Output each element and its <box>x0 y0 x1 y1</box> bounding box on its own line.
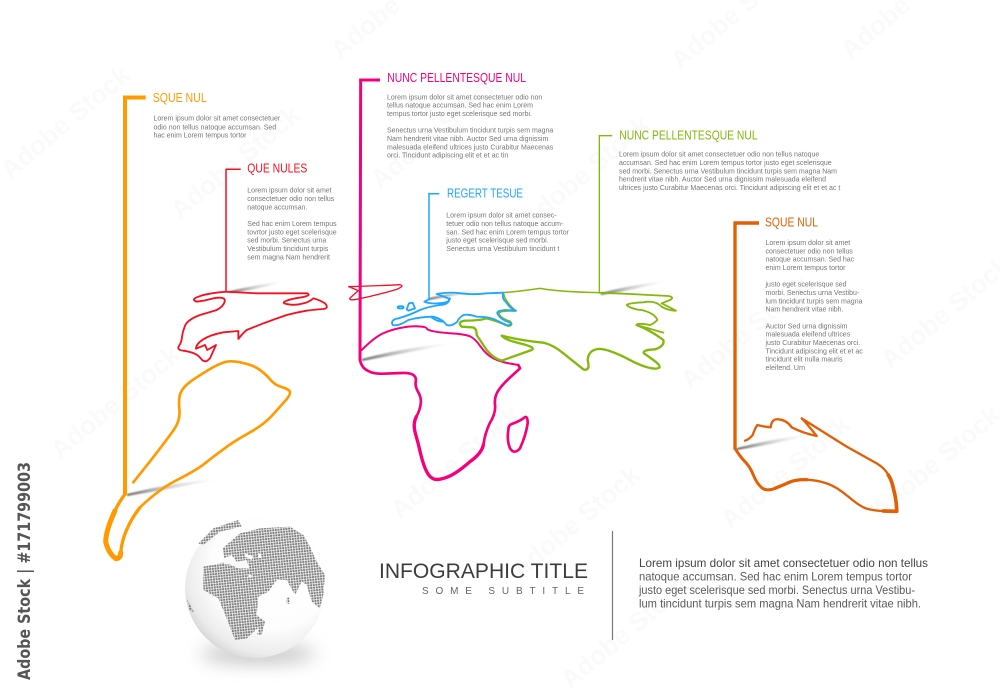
text: orange block: odio non tellus natoque accumsan. Sed <box>154 122 276 131</box>
label: NUNC PELLENTESQUE NUL pink <box>361 71 554 160</box>
text: red block: Vestibulum tincidunt turpis <box>247 244 329 253</box>
continent: Africa (pink) <box>360 80 528 479</box>
text: summary paragraph: justo eget scelerisque sed morbi. Senectus urna Vestibu- <box>638 584 915 597</box>
stock credit: Adobe Stock | #171799003 <box>15 462 35 680</box>
text: pink block: tempus tortor justo eget scelerisque sed morbi. <box>387 109 532 118</box>
text: pink block: orci. Tincidunt adipiscing elit et et ac tin <box>387 151 508 160</box>
text: red block: sem magna Nam hendrerit <box>247 252 330 261</box>
text: dark orange block: natoque accumsan. Sed hac <box>766 255 855 264</box>
label: QUE NULES red <box>226 162 337 261</box>
text: dark orange block: justo eget scelerisque sed <box>765 280 846 289</box>
text: orange block: Lorem ipsum dolor sit amet consectetuer <box>154 114 281 123</box>
icon: dotted globe <box>185 518 325 658</box>
watermark: Adobe Stock <box>555 569 696 695</box>
text: summary paragraph: lum tincidunt turpis sem magna Nam hendrerit vitae nibh. <box>639 598 921 610</box>
text: pink block: Senectus urna Vestibulum tincidunt turpis sem magna <box>387 126 553 135</box>
text: dark orange block: malesuada eleifend ultrices <box>766 330 851 339</box>
text: dark orange block: enim Lorem tempus tortor <box>766 263 846 272</box>
text: dark orange block: Auctor Sed urna dignissim <box>766 321 848 330</box>
text: pink block <box>387 92 554 160</box>
label: QUE NULES red: QUE NULES <box>247 162 307 176</box>
text: dark orange block: consectetuer odio non tellus <box>766 246 853 255</box>
text: red block: Sed hac enim Lorem tempus <box>247 219 337 228</box>
text: pink block: Nam hendrerit vitae nibh. Auctor Sed urna dignissim <box>387 134 548 143</box>
label: REGERT TESUE blue: REGERT TESUE <box>447 186 523 200</box>
text: red block: natoque accumsan. <box>247 202 307 211</box>
watermark: Adobe Stock <box>715 409 856 535</box>
text: summary paragraph <box>638 557 928 610</box>
watermark: Adobe Stock <box>365 69 506 195</box>
label: SQUE NUL orange <box>125 91 281 140</box>
connector shadows <box>127 281 810 496</box>
text: dark orange block: Nam hendrerit vitae nibh. <box>766 305 844 314</box>
text: dark orange block: justo Curabitur Maecenas orci. <box>765 338 860 347</box>
text: dark orange block: tincidunt elit nulla mauris <box>766 355 843 364</box>
text: green block: accumsan. Sed hac enim Lorem tempus tortor justo eget scelerisque <box>619 158 832 167</box>
watermark: Adobe Stock <box>675 269 816 395</box>
text: blue block: tetuer odio non tellus natoque accum- <box>446 219 564 228</box>
text: red block: tovrtor justo eget scelerisque <box>247 227 337 236</box>
text: orange block <box>154 114 281 140</box>
label: REGERT TESUE blue <box>429 186 570 253</box>
text: green block: ultrices justo Curabitur Maecenas orci. Tincidunt adipiscing elit et et ac t <box>619 183 840 192</box>
text: orange block: hac enim Lorem tempus tortor <box>154 131 247 140</box>
globe shadow <box>200 645 316 663</box>
text: dark orange block: morbi. Senectus urna Vestibu- <box>766 288 860 297</box>
text: dark orange block: eleifend. Urn <box>766 363 805 372</box>
continent: North America (red) <box>178 169 327 361</box>
watermark: Adobe Stock <box>385 399 526 525</box>
continent: Australia (dark orange) <box>735 223 897 511</box>
text: summary paragraph: natoque accumsan. Sed hac enim Lorem tempus tortor <box>639 570 912 584</box>
text: blue block: Lorem ipsum dolor sit amet consec- <box>446 211 557 220</box>
text: green block: hendrerit vitae nibh. Auctor Sed urna dignissim malesuada eleifend <box>619 175 826 184</box>
label: NUNC PELLENTESQUE NUL green: NUNC PELLENTESQUE NUL <box>619 128 758 142</box>
text: blue block: Senectus urna Vestibulum tincidunt t <box>446 244 559 253</box>
text: green block: Lorem ipsum dolor sit amet consectetuer odio non tellus natoque <box>619 150 819 159</box>
text: dark orange block <box>765 238 863 372</box>
text: dark orange block: Tincidunt adipiscing elit et et ac <box>766 346 863 355</box>
label: SQUE NUL orange: SQUE NUL <box>153 91 207 105</box>
text: red block: sed morbi. Senectus urna <box>247 236 326 245</box>
label: SQUE NUL dark orange <box>735 216 863 372</box>
continent: Greenland (red) <box>349 285 402 300</box>
watermark: Adobe Stock <box>515 109 656 235</box>
text: pink block: tellus natoque accumsan. Sed hac enim Lorem <box>387 101 533 110</box>
text: green block <box>619 150 840 192</box>
label: SQUE NUL dark orange: SQUE NUL <box>765 216 818 230</box>
text: dark orange block: lum tincidunt turpis sem magna <box>766 296 862 305</box>
text: red block <box>247 186 337 261</box>
watermark: Adobe Stock <box>45 339 186 465</box>
text: summary paragraph: Lorem ipsum dolor sit amet consectetuer odio non tellus <box>639 557 928 570</box>
continent: Europe (blue) <box>392 193 516 325</box>
watermark: Adobe Stock <box>505 459 646 585</box>
text: blue block: justo eget scelerisque sed morbi. <box>445 236 549 245</box>
subtitle: SOME SUBTITLE <box>422 586 584 597</box>
text: dark orange block: Lorem ipsum dolor sit amet <box>766 238 850 247</box>
label: NUNC PELLENTESQUE NUL pink: NUNC PELLENTESQUE NUL <box>387 71 526 85</box>
label: NUNC PELLENTESQUE NUL green <box>599 128 840 192</box>
text: green block: sed morbi. Senectus urna Vestibulum tincidunt turpis sem magna Nam <box>619 166 837 175</box>
text: pink block: malesuada eleifend ultrices justo Curabitur Maecenas <box>387 142 554 151</box>
title: INFOGRAPHIC TITLE <box>379 559 588 583</box>
continent: Asia (green) <box>460 136 676 370</box>
text: red block: Lorem ipsum dolor sit amet <box>247 186 332 195</box>
text: red block: consectetuer odio non tellus <box>247 194 335 203</box>
text: blue block: san. Sed hac enim Lorem tempus tortor <box>446 227 570 236</box>
text: pink block: Lorem ipsum dolor sit amet consectetuer odio non <box>387 92 542 101</box>
island: Madagascar <box>508 417 528 452</box>
text: blue block <box>445 211 570 253</box>
watermark: Adobe Stock <box>165 99 306 225</box>
continent: South America (orange) <box>106 98 290 559</box>
